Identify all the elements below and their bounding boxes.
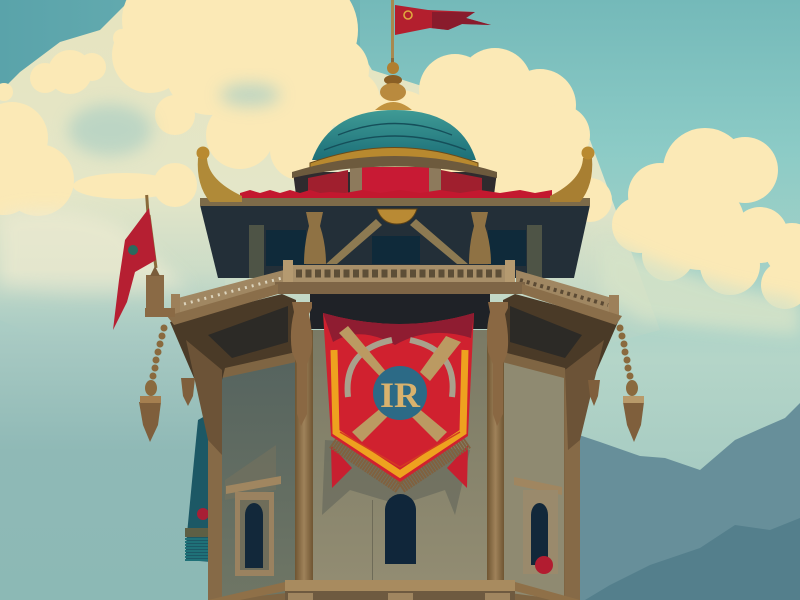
clouds: pale base layer	[0, 0, 660, 400]
finial	[375, 50, 412, 110]
central eave shadow	[310, 293, 490, 329]
lower roof underside	[200, 205, 590, 278]
tower walls	[208, 330, 580, 600]
red scalloped roof strip	[240, 190, 552, 198]
left pennant	[113, 195, 156, 330]
clouds: left soft haze band	[0, 209, 190, 296]
central balustrade	[275, 260, 525, 294]
lower eave right	[503, 294, 618, 450]
side drop pendants	[181, 378, 600, 406]
left window	[226, 476, 281, 576]
clouds: upper left cream puffs	[0, 0, 440, 180]
right bead chain	[616, 324, 634, 380]
clouds: right lower haze	[600, 235, 800, 335]
right horn finial	[550, 146, 594, 202]
top flag	[395, 5, 491, 35]
banner	[323, 313, 474, 488]
right railing	[516, 270, 619, 319]
banner fringe	[333, 442, 467, 487]
banner cloth	[323, 313, 474, 482]
hanging teal cloth	[185, 412, 212, 562]
emblem disc	[373, 366, 427, 420]
right carved bracket	[487, 302, 508, 426]
banner tails	[331, 445, 468, 488]
dome	[292, 110, 497, 178]
roof slab	[200, 198, 590, 206]
emblem arcs	[348, 340, 453, 397]
upper drum	[293, 165, 497, 195]
clouds: central cream puffs	[395, 48, 612, 222]
emblem letters: IR	[380, 375, 421, 415]
banner shadow	[322, 440, 470, 515]
base cornice	[208, 580, 580, 600]
clouds: right puffs	[612, 128, 800, 309]
right eave trim	[522, 284, 622, 325]
flag pole	[391, 0, 394, 58]
emblem swords	[339, 326, 461, 442]
left hanging lantern	[139, 380, 161, 442]
lower eave left	[170, 294, 296, 455]
mountains	[570, 403, 800, 600]
left bead chain	[150, 324, 168, 380]
left horn finial	[196, 146, 242, 202]
roof columns and braces	[304, 212, 491, 264]
left eave trim	[167, 284, 278, 325]
clouds: blue shadow patches	[68, 83, 280, 156]
lower left haze	[0, 270, 225, 600]
right hanging lantern	[623, 380, 644, 442]
left railing	[171, 270, 284, 318]
gold medallion	[377, 209, 417, 224]
central arched window	[385, 494, 416, 564]
clouds: left lower cream puffs	[0, 102, 197, 216]
left lantern	[145, 266, 175, 317]
banner border	[334, 350, 465, 474]
right window	[514, 477, 562, 574]
left carved bracket	[291, 302, 312, 426]
